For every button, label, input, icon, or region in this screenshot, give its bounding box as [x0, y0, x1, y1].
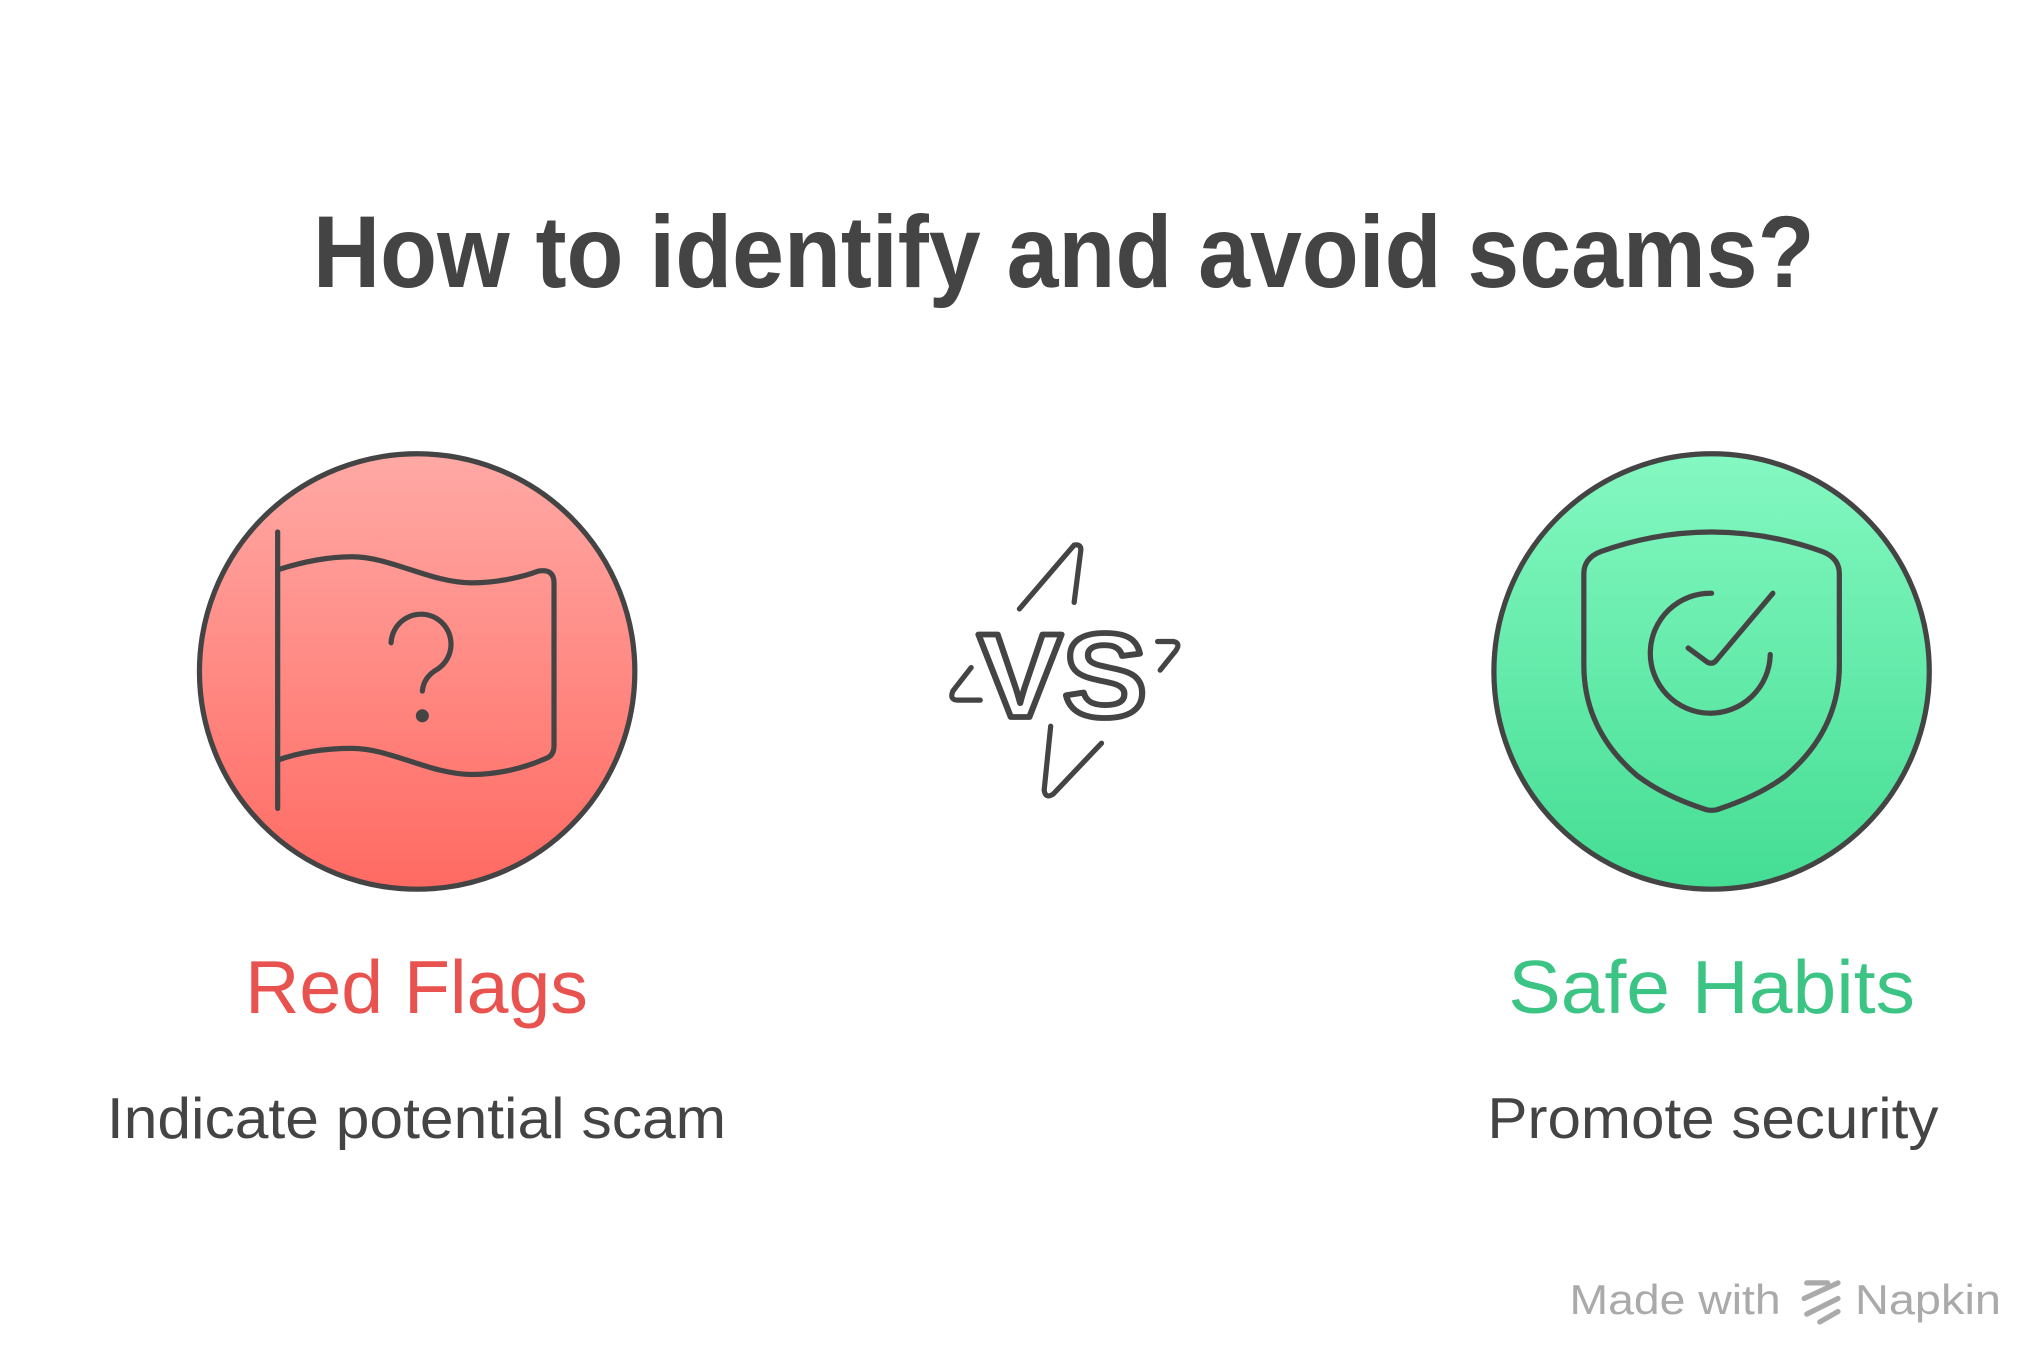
watermark [1570, 1276, 2001, 1323]
icon: VS [952, 545, 1178, 796]
icon: VS: VS [978, 609, 1147, 743]
icon: red circle with flag [199, 454, 635, 889]
heading: Red Flags: Red Flags [245, 946, 588, 1030]
watermark: Napkin [1855, 1276, 2001, 1323]
panel: red flags [107, 454, 726, 1151]
heading: Safe Habits: Safe Habits [1508, 946, 1915, 1030]
text: Indicate potential scam: Indicate potential scam [107, 1087, 726, 1151]
icon: green circle with shield [1494, 454, 1929, 889]
watermark: Made with [1570, 1276, 1781, 1323]
panel: safe habits [1487, 454, 1939, 1151]
title: How to identify and avoid scams? [313, 195, 1815, 309]
text: Promote security: Promote security [1487, 1087, 1939, 1151]
